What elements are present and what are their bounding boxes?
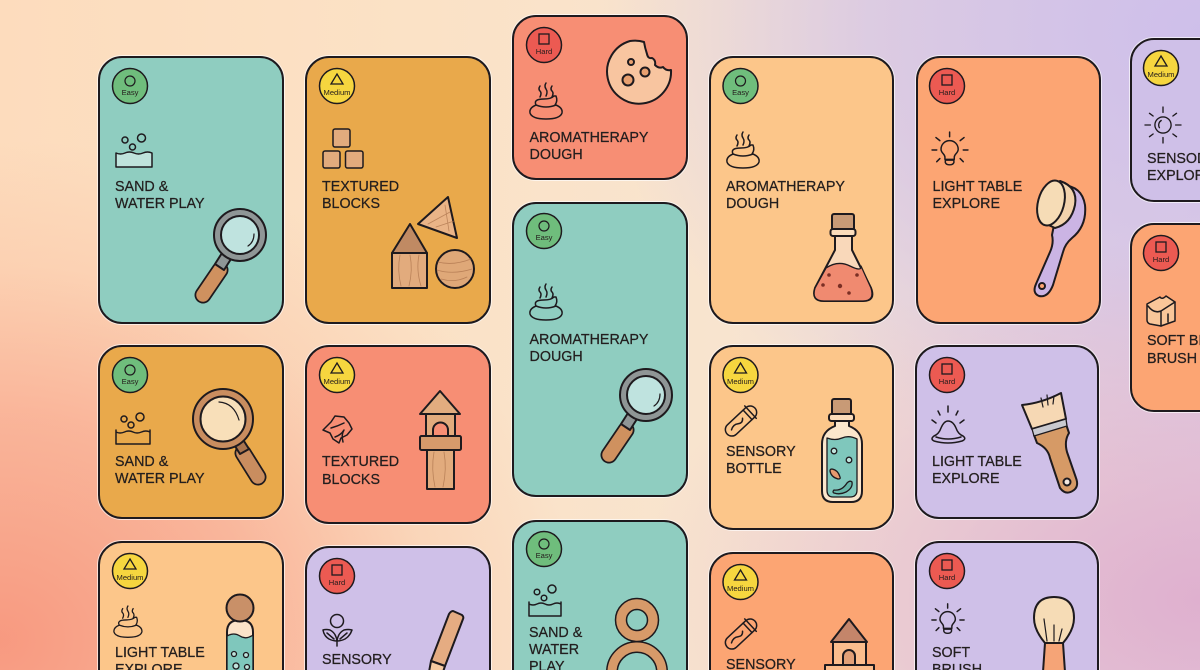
icon: flower — [323, 614, 352, 646]
title: AROMATHERAPY — [530, 332, 648, 348]
illustration: bead tube — [226, 594, 254, 670]
badge: easy — [112, 68, 148, 104]
title: BRUSH — [1147, 351, 1197, 367]
icon: light bulb — [932, 132, 968, 165]
illustration: wooden shapes — [392, 197, 474, 288]
badge: easy: Easy — [122, 377, 139, 386]
icon: crumbly box — [1147, 296, 1175, 326]
badge: hard: Hard — [1153, 255, 1169, 264]
panel: light table explore light orange card — [99, 542, 283, 670]
icon: water with bubbles — [116, 134, 152, 167]
panel: sensory lavender card — [306, 547, 490, 670]
badge: easy: Easy — [732, 88, 749, 97]
title: BLOCKS — [322, 196, 380, 212]
badge: medium: Medium — [323, 88, 351, 97]
badge: hard — [320, 558, 354, 594]
title: WATER PLAY — [115, 196, 205, 212]
panel: aromatherapy dough coral card — [513, 16, 687, 179]
illustration: cookie with bite — [607, 41, 671, 104]
badge: easy — [112, 358, 148, 392]
panel: sand and water play teal card bottom — [513, 521, 687, 670]
badge: medium: Medium — [116, 573, 144, 582]
badge: easy: Easy — [122, 88, 139, 97]
title: DOUGH — [530, 147, 583, 163]
title: SAND & — [115, 454, 168, 470]
illustration: paint brush — [1022, 393, 1077, 493]
panel: light table explore orange card — [917, 57, 1100, 323]
badge: easy: Easy — [536, 551, 553, 560]
badge: medium: Medium — [323, 377, 351, 386]
panel: sand and water play teal card — [99, 57, 283, 323]
badge: easy — [526, 214, 562, 248]
panel: textured blocks amber card — [306, 57, 490, 323]
badge: hard — [930, 554, 964, 588]
title: LIGHT TABLE — [115, 645, 205, 661]
title: AROMATHERAPY — [530, 130, 648, 146]
badge: hard — [930, 358, 964, 392]
badge: medium: Medium — [727, 377, 754, 386]
illustration: magnifying glass — [203, 209, 266, 295]
title: SENSORY — [726, 444, 796, 460]
badge: medium: Medium — [727, 584, 754, 593]
title: TEXTURED — [322, 454, 399, 470]
badge: easy — [723, 68, 758, 104]
title: AROMATHERAPY — [726, 179, 845, 195]
badge: easy: Easy — [536, 233, 553, 242]
badge: easy — [526, 532, 562, 566]
icon: steaming dough — [727, 132, 759, 168]
panel: light table explore lavender card — [916, 346, 1098, 518]
title: SENSORY — [322, 652, 392, 668]
icon: steaming dough — [530, 83, 562, 119]
badge: hard — [930, 68, 964, 104]
badge: hard: Hard — [939, 573, 955, 582]
icon: water with bubbles — [529, 585, 561, 616]
title: SAND & — [115, 179, 168, 195]
illustration: wooden block tower — [420, 391, 461, 489]
icon: water with bubbles — [116, 413, 150, 444]
title: LIGHT TABLE — [932, 454, 1022, 470]
panel: sensory orange card — [710, 553, 893, 670]
illustration: magnifying glass wood — [193, 389, 258, 477]
icon: steaming dough — [114, 606, 142, 637]
badge: hard — [526, 28, 562, 62]
title: EXPLORE — [932, 196, 1000, 212]
panel: sensory bottle light orange card — [710, 346, 893, 529]
illustration: wooden rings — [612, 604, 662, 670]
icon: tube — [721, 402, 761, 440]
icon: sand dome with rays — [932, 406, 965, 443]
illustration: wooden house — [825, 619, 874, 670]
panel: textured blocks coral card — [306, 346, 490, 523]
panel: soft brush orange card — [1131, 224, 1200, 411]
badge: hard: Hard — [939, 377, 955, 386]
panel: sensory explore lavender card — [1131, 39, 1200, 201]
title: WATER PLAY — [115, 471, 205, 487]
panel: aromatherapy dough light orange card — [710, 57, 893, 323]
badge: medium — [1144, 50, 1178, 86]
badge: medium — [320, 358, 354, 392]
panel: sand and water play amber card — [99, 346, 283, 518]
title: TEXTURED — [322, 179, 399, 195]
badge: hard: Hard — [329, 578, 345, 587]
title: LIGHT TABLE — [932, 179, 1022, 195]
badge: medium — [723, 564, 758, 600]
illustration: magnifying glass — [609, 369, 672, 455]
title: BOTTLE — [726, 461, 782, 477]
icon: tube — [721, 615, 761, 653]
badge: medium — [320, 68, 354, 104]
icon: crumpled clay — [323, 416, 352, 443]
panel: soft brush lavender card — [916, 542, 1098, 670]
badge: medium: Medium — [1147, 70, 1175, 79]
illustration: flask with liquid — [814, 214, 872, 301]
icon: steaming dough — [530, 284, 562, 320]
illustration: sensory bottle — [822, 399, 862, 502]
title: EXPLORE — [932, 471, 1000, 487]
illustration: wooden pencil — [429, 611, 463, 670]
badge: hard — [1144, 236, 1178, 270]
title: SOFT — [932, 645, 970, 661]
badge: medium — [112, 554, 148, 588]
icon: light bulb — [932, 604, 964, 633]
panel: aromatherapy dough teal card — [513, 203, 687, 496]
badge: medium — [723, 358, 758, 392]
illustration: shaving brush — [1034, 597, 1074, 670]
title: WATER — [529, 642, 579, 658]
title: DOUGH — [726, 196, 779, 212]
title: SAND & — [529, 625, 582, 641]
illustration: round bristle brush — [1032, 177, 1085, 296]
title: DOUGH — [530, 349, 583, 365]
badge: hard: Hard — [939, 88, 955, 97]
badge: hard: Hard — [536, 47, 552, 56]
title: BLOCKS — [322, 472, 380, 488]
icon: sun — [1145, 107, 1181, 143]
icon: three small blocks — [323, 129, 363, 168]
